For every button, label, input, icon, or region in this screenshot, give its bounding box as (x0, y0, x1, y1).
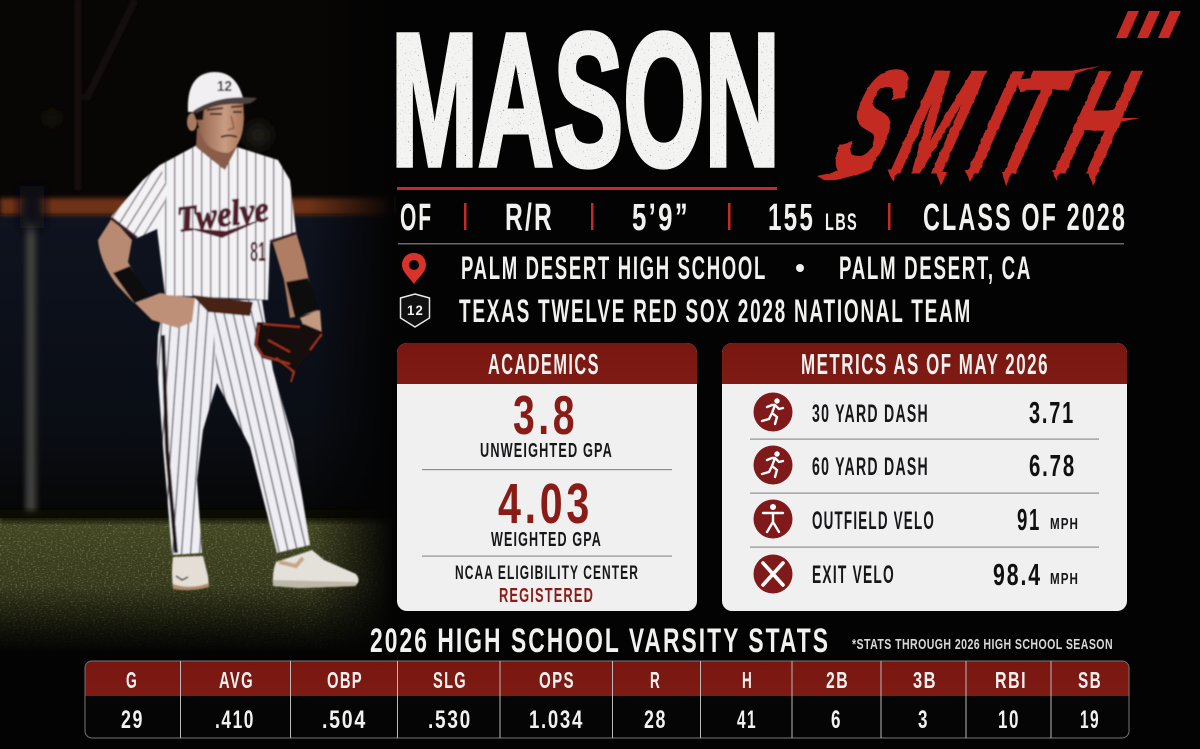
glove (254, 322, 323, 382)
table header labels: RBI (995, 667, 1027, 693)
left hand (135, 293, 195, 328)
bio line: position, handedness, height, weight, class: LBS (825, 209, 858, 236)
metric value: 98.4 (993, 557, 1042, 592)
table header labels: G (126, 667, 138, 693)
metric value: 3.71 (1029, 395, 1075, 430)
metric label: 30 YARD DASH (812, 400, 929, 428)
bio line: position, handedness, height, weight, class: R/R (505, 197, 554, 239)
left wristband (113, 266, 148, 304)
table values: .410 (215, 706, 255, 734)
table values: 6 (831, 706, 842, 734)
weighted gpa label: WEIGHTED GPA (491, 529, 602, 551)
table header labels: R (650, 667, 661, 693)
table header labels: AVG (219, 667, 254, 693)
table header labels: SLG (433, 667, 467, 693)
metric row: exit velo (754, 554, 1079, 594)
pant stripe (163, 335, 176, 553)
player photo illustration (98, 72, 359, 590)
metric row: 30 yard dash (754, 392, 1075, 432)
jersey (111, 145, 296, 300)
table values: .530 (428, 706, 472, 734)
school line: PALM DESERT HIGH SCHOOL (461, 250, 767, 286)
stats heading: 2026 HIGH SCHOOL VARSITY STATS (370, 622, 830, 660)
sleeve trim (111, 218, 296, 242)
metric label: 60 YARD DASH (812, 453, 929, 481)
sleeve left (111, 165, 168, 238)
icon: runner (754, 446, 792, 484)
table header labels: SB (1078, 667, 1102, 693)
left leg (157, 297, 240, 555)
face (196, 98, 244, 153)
table header labels: OBP (327, 667, 363, 693)
metric row: 60 yard dash (754, 446, 1076, 484)
neck (196, 128, 237, 170)
table values: 1.034 (529, 706, 584, 734)
icon: thrower (754, 500, 792, 538)
jersey script wordmark: Twelve (175, 189, 271, 240)
bio line: position, handedness, height, weight, class: 155 (768, 197, 815, 239)
metric value: 6.78 (1029, 448, 1076, 483)
cap brim (193, 97, 257, 113)
metric label: EXIT VELO (812, 561, 895, 589)
metric row: outfield velo (754, 500, 1079, 538)
corner slashes (1116, 11, 1181, 38)
jersey swoosh (187, 217, 268, 238)
icon: team shield: 12 (407, 302, 424, 318)
table header labels: H (742, 667, 753, 693)
panel: metrics (722, 343, 1127, 611)
registered status: REGISTERED (499, 585, 594, 607)
icon: team shield (400, 294, 430, 327)
hair (193, 103, 222, 120)
first name: MASON: MASON (391, 0, 780, 206)
unweighted gpa value: 3.8 (513, 384, 578, 446)
last name: SMITH: SMITH (812, 42, 1160, 204)
icon: crossed bats (754, 554, 792, 594)
table values: 10 (998, 706, 1020, 734)
jersey number: 81 (250, 236, 266, 267)
right leg (212, 300, 310, 553)
table header labels (126, 667, 1102, 693)
bio line: position, handedness, height, weight, class: 5’9” (632, 197, 690, 239)
metrics header (722, 343, 1127, 384)
metric unit: MPH (1050, 516, 1079, 533)
stats table (85, 661, 1129, 738)
table header band (86, 662, 1128, 696)
table values: 29 (121, 706, 144, 734)
cap logo: 12 (217, 78, 232, 95)
cap (188, 72, 243, 112)
table header labels: 2B (826, 667, 849, 693)
bio line: position, handedness, height, weight, class: OF (400, 197, 433, 239)
icon: location pin (402, 253, 426, 284)
metric unit: MPH (1050, 571, 1079, 588)
school line: PALM DESERT, CA (839, 250, 1032, 286)
panel: academics (397, 343, 697, 611)
icon: runner (754, 392, 792, 432)
table values: 28 (644, 706, 667, 734)
table header labels: OPS (539, 667, 575, 693)
table values: 41 (737, 706, 757, 734)
table header labels: 3B (913, 667, 937, 693)
red name underline (397, 187, 777, 190)
shoe left (172, 556, 209, 590)
shoe right (273, 550, 359, 588)
academics header (397, 343, 697, 384)
right arm (272, 232, 318, 318)
table values (121, 706, 1100, 734)
photo backdrop: outfield fence and grass (0, 0, 394, 660)
academics heading: ACADEMICS (488, 349, 600, 381)
left arm (98, 218, 147, 303)
ear (187, 113, 197, 131)
table values: 3 (918, 706, 929, 734)
table values: .504 (322, 706, 367, 734)
table values: 19 (1080, 706, 1100, 734)
weighted gpa value: 4.03 (498, 472, 593, 536)
ncaa label: NCAA ELIGIBILITY CENTER (455, 563, 639, 584)
belt (192, 295, 253, 316)
bio line: position, handedness, height, weight, class (400, 197, 1127, 239)
eyes, nose and mouth (207, 106, 243, 137)
metric value: 91 (1017, 502, 1041, 537)
metric label: OUTFIELD VELO (812, 507, 935, 535)
right wristband (286, 278, 318, 318)
unweighted gpa label: UNWEIGHTED GPA (480, 440, 613, 462)
table frame (85, 661, 1129, 738)
